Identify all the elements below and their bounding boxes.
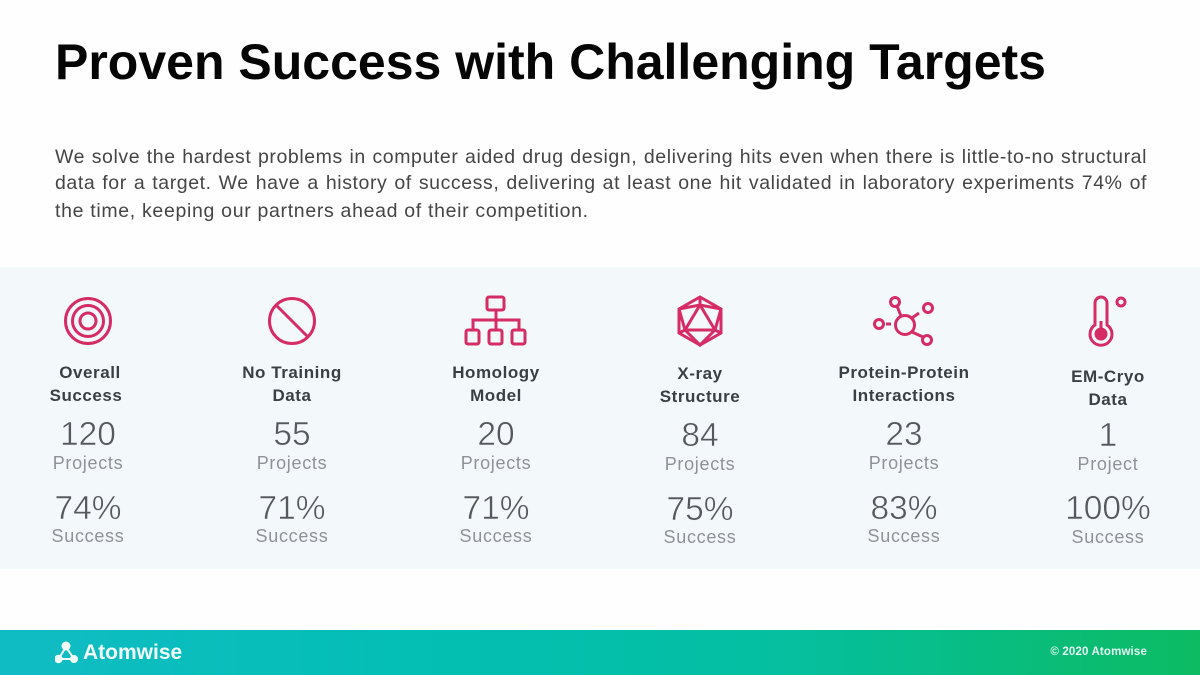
heading: Success: [50, 386, 122, 405]
heading: No Training: [242, 363, 342, 382]
project count: 23: [885, 416, 923, 453]
success label: Success: [868, 526, 940, 546]
wordmark: Atomwise: [83, 641, 182, 664]
intro text block: the time, keeping our partners ahead of their competition.: [55, 200, 589, 222]
projects label: Projects: [665, 454, 735, 474]
icon: molecular network: [873, 296, 934, 346]
icon: thermometer: [1088, 296, 1126, 347]
success rate: 100%: [1065, 490, 1151, 527]
column: overall success: [50, 297, 124, 546]
column: homology model: [452, 296, 540, 546]
success rate: 83%: [870, 490, 938, 527]
intro text block: [55, 146, 1147, 222]
logo: Atomwise: [55, 641, 182, 664]
project count: 20: [477, 416, 515, 453]
success label: Success: [256, 526, 328, 546]
icon: target: [64, 297, 112, 345]
success label: Success: [1072, 527, 1144, 547]
success rate: 75%: [666, 491, 734, 528]
heading: Data: [1088, 390, 1128, 409]
heading: Model: [470, 386, 522, 405]
icon: icosahedron: [678, 295, 722, 347]
intro text block: We solve the hardest problems in computer aided drug design, delivering hits even when there is little-to-no structural: [55, 146, 1147, 168]
success label: Success: [664, 527, 736, 547]
success label: Success: [52, 526, 124, 546]
projects label: Projects: [869, 453, 939, 473]
heading: Interactions: [853, 386, 955, 405]
success rate: 74%: [54, 490, 122, 527]
project count: 120: [60, 416, 116, 453]
heading: X-ray: [677, 364, 723, 383]
title: Proven Success with Challenging Targets: [55, 34, 1046, 90]
heading: Homology: [452, 363, 540, 382]
project label: Project: [1078, 454, 1138, 474]
heading: [242, 363, 342, 405]
project count: 55: [273, 416, 311, 453]
column: x-ray structure: [660, 295, 740, 547]
projects label: Projects: [257, 453, 327, 473]
icon: prohibited: [268, 297, 316, 345]
heading: Protein-Protein: [838, 363, 970, 382]
icon: hierarchy: [464, 296, 526, 346]
success label: Success: [460, 526, 532, 546]
heading: Data: [272, 386, 312, 405]
footer bar: [0, 630, 1200, 675]
logo mark: [55, 642, 78, 664]
panel: statistics band: [0, 267, 1200, 569]
heading: [1071, 367, 1145, 409]
heading: Structure: [660, 387, 740, 406]
projects label: Projects: [461, 453, 531, 473]
intro text block: data for a target. We have a history of success, delivering at least one hit validated in laboratory experiments 74% of: [55, 172, 1147, 194]
project count: 84: [681, 417, 719, 454]
heading: [838, 363, 970, 405]
column: no training data: [242, 297, 342, 546]
heading: [660, 364, 740, 406]
column: protein-protein interactions: [838, 296, 970, 546]
heading: [50, 363, 122, 405]
heading: [452, 363, 540, 405]
success rate: 71%: [258, 490, 326, 527]
project count: 1: [1099, 417, 1117, 454]
heading: EM-Cryo: [1071, 367, 1145, 386]
copyright: © 2020 Atomwise: [1050, 646, 1147, 658]
success rate: 71%: [462, 490, 530, 527]
column: em-cryo data: [1065, 296, 1151, 547]
heading: Overall: [59, 363, 121, 382]
projects label: Projects: [53, 453, 123, 473]
